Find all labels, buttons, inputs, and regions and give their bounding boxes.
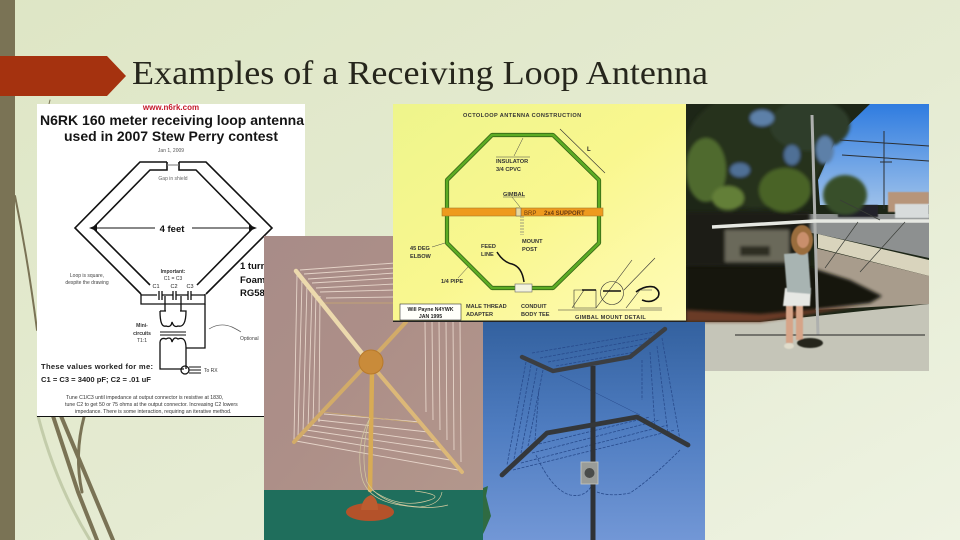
tuning notes: tune C2 to get 50 or 75 ohms at the output connector. Increasing C2 lowers [65, 402, 238, 408]
road and gravel [790, 214, 929, 310]
mast [590, 366, 596, 540]
conduit tee [515, 284, 532, 292]
trees [685, 92, 867, 266]
top bar [522, 329, 665, 371]
panel: photo of wooden cross loop antenna [264, 236, 484, 540]
girl [783, 225, 823, 349]
turn label: RG58 [240, 288, 265, 299]
website url: www.n6rk.com [142, 103, 199, 112]
ground line [735, 334, 925, 336]
gap label: Gap in shield [158, 176, 188, 182]
pipe label [441, 267, 468, 285]
panel: octoloop construction diagram: ADAPTER [466, 312, 493, 318]
male thread label: MALE THREAD [466, 304, 507, 310]
schematic heading: N6RK 160 meter receiving loop antenna [40, 112, 304, 128]
panel: N6RK loop antenna schematic [37, 103, 305, 418]
gimbal detail label: GIMBAL MOUNT DETAIL [575, 315, 646, 321]
insulator label: 3/4 CPVC [496, 167, 521, 173]
panel: N6RK loop antenna schematic: C3 [186, 284, 194, 290]
panel: photo of metal loop antenna against sky [483, 322, 705, 540]
insulator label: INSULATOR [496, 159, 528, 165]
transformer label: Mini- [136, 323, 148, 329]
tuning notes: Tune C1/C3 until impedance at output connector is resistive at 1830, [66, 395, 223, 401]
capacitor note: Important: [161, 269, 186, 275]
antenna loop wires [825, 200, 905, 272]
shadow [686, 264, 882, 316]
panel: N6RK loop antenna schematic: circuits [133, 331, 151, 337]
optional label [209, 325, 241, 332]
tuning notes: impedance. There is some interaction, requiring an iterative method. [75, 409, 231, 415]
schematic subheading: used in 2007 Stew Perry contest [64, 128, 278, 144]
amplifier box [581, 462, 598, 484]
mount post [521, 216, 523, 235]
elbow label [410, 243, 445, 260]
length marker [560, 129, 605, 173]
green table [264, 490, 484, 540]
values heading: These values worked for me: [41, 362, 153, 371]
support beam [442, 208, 603, 217]
panel: N6RK loop antenna schematic: despite the drawing [65, 280, 109, 286]
title: Examples of a Receiving Loop Antenna [132, 55, 708, 92]
author box: Will Payne N4YWK [407, 307, 454, 313]
antenna mast [812, 115, 818, 335]
gimbal detail drawing [558, 258, 662, 310]
feed line: LINE [481, 252, 494, 258]
feed line: FEED [481, 244, 496, 250]
support beam: 2x4 SUPPORT [544, 211, 585, 217]
title arrow banner [0, 56, 126, 96]
panel: N6RK loop antenna schematic: T1:1 [137, 338, 147, 344]
width dimension [89, 225, 257, 232]
elbow label: ELBOW [410, 254, 432, 260]
panel: octoloop construction diagram: POST [522, 247, 538, 253]
date: Jan 1, 2009 [158, 148, 184, 154]
left side bar [0, 0, 15, 540]
base [346, 495, 394, 521]
octagon loop [447, 135, 599, 288]
insulator label [496, 138, 530, 173]
tuning notes [65, 395, 238, 415]
panel: N6RK loop antenna schematic: C2 [170, 284, 178, 290]
pipe label: 1/4 PIPE [441, 279, 463, 285]
buildings and vehicles [838, 192, 929, 218]
author box: JAN 1995 [419, 314, 442, 320]
turn label: Foam [240, 275, 265, 286]
hub [359, 350, 383, 374]
turn label: 1 turn [240, 261, 267, 272]
conduit label: CONDUIT [521, 304, 547, 310]
width dimension: 4 feet [160, 224, 185, 235]
receiver label: To RX [204, 368, 218, 374]
feed line [481, 244, 524, 282]
panel: N6RK loop antenna schematic: C1 = C3 [164, 276, 182, 282]
loop wires [507, 332, 680, 496]
diagram heading: OCTOLOOP ANTENNA CONSTRUCTION [463, 113, 582, 119]
support beam: BRP [524, 211, 536, 217]
foliage [483, 486, 491, 534]
mount post label: MOUNT [522, 239, 543, 245]
sky [818, 104, 929, 205]
elbow label: 45 DEG [410, 246, 430, 252]
length marker: L [587, 147, 591, 153]
loop note: Loop is square, [70, 273, 104, 279]
antenna wires [294, 263, 461, 470]
panel: N6RK loop antenna schematic: Optional [240, 336, 259, 342]
panel: octoloop construction diagram [393, 104, 686, 322]
loose feed wires [360, 418, 448, 508]
panel: octoloop construction diagram: BODY TEE [521, 312, 550, 318]
capacitor network and transformer [141, 291, 205, 374]
capacitor values: C1 = C3 = 3400 pF; C2 = .01 uF [41, 375, 151, 384]
author box [400, 304, 461, 320]
lower bar [502, 417, 688, 475]
gimbal label: GIMBAL [503, 192, 526, 198]
panel: photo of girl with antenna [685, 92, 929, 371]
concrete [686, 304, 929, 371]
turn label [240, 262, 264, 296]
cross arms [294, 271, 462, 490]
loop outline [75, 162, 272, 294]
decorative grass strands [15, 100, 113, 540]
antenna crossbar [712, 221, 929, 227]
utility pole [840, 131, 929, 209]
gimbal label [503, 192, 526, 207]
capacitor labels: C1 [152, 284, 160, 290]
